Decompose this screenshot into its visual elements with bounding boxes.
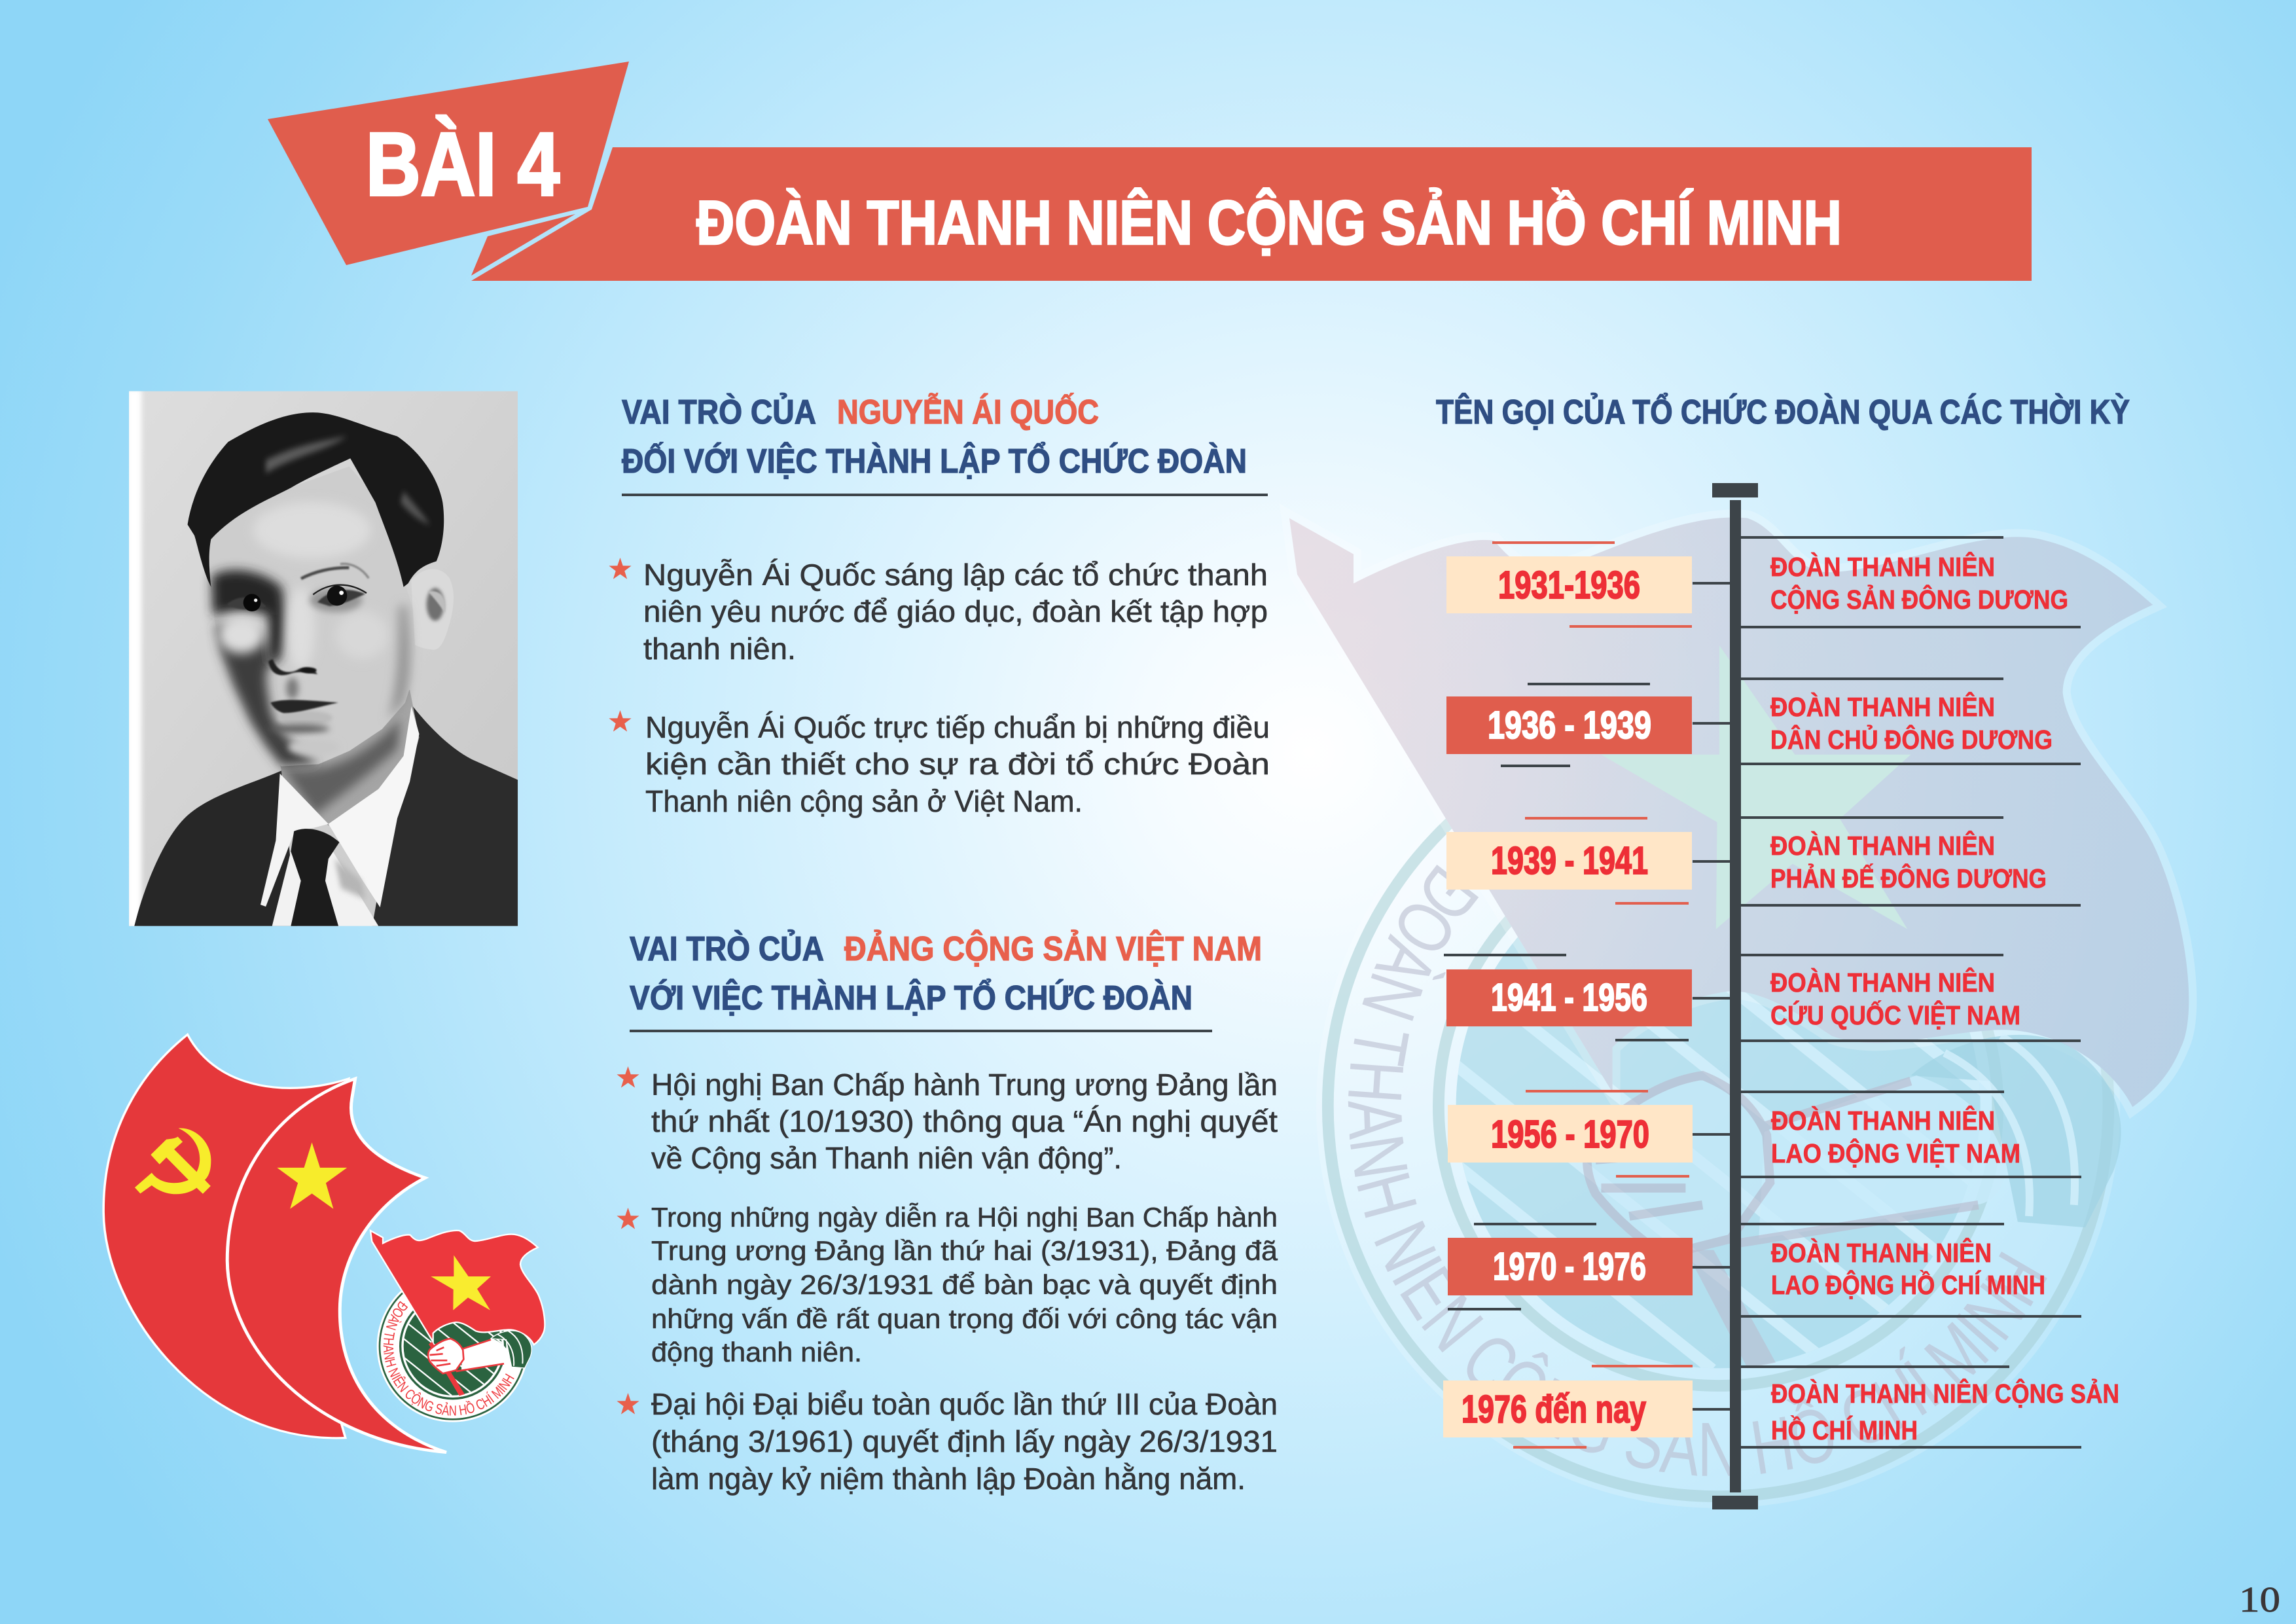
timeline entry 1976 to present: ĐOÀN THANH NIÊN CỘNG SẢN [1771, 1379, 2119, 1409]
timeline entry 1970-1976 [1448, 1224, 2081, 1316]
timeline entry 1939-1941: ĐOÀN THANH NIÊN [1770, 831, 1995, 861]
bullet 2 [617, 1202, 1278, 1367]
emblem flag [370, 1231, 545, 1344]
timeline entry 1939-1941: PHẢN ĐẾ ĐÔNG DƯƠNG [1770, 863, 2047, 893]
timeline entry 1941-1956 [1444, 955, 2081, 1041]
fist [428, 1339, 463, 1373]
arm [461, 1339, 509, 1370]
timeline entry 1931-1936: 1931-1936 [1498, 564, 1640, 607]
emblem star [431, 1255, 491, 1310]
flag star [277, 1142, 347, 1209]
timeline entry 1941-1956: CỨU QUỐC VIỆT NAM [1770, 1000, 2020, 1030]
lesson tag text: BÀI 4 [366, 115, 560, 215]
timeline entry 1931-1936: CỘNG SẢN ĐÔNG DƯƠNG [1770, 585, 2068, 615]
lesson tag shape [268, 62, 629, 265]
section heading: Party role [630, 929, 1262, 1031]
watermark: youth union emblem [1289, 511, 2197, 1508]
arm edges [456, 1340, 504, 1371]
bullet 1: Hội nghị Ban Chấp hành Trung ương Đảng lần [651, 1068, 1278, 1102]
bullet 3 [617, 1387, 1278, 1496]
bullet 2 [609, 710, 1270, 818]
bullet 2: dành ngày 26/3/1931 để bàn bạc và quyết định [651, 1269, 1278, 1300]
emblem seal: ĐOÀN THANH NIÊN CỘNG SẢN HỒ CHÍ MINH [384, 1301, 514, 1415]
flags illustration [103, 1034, 446, 1453]
bullet 3: làm ngày kỷ niệm thành lập Đoàn hằng năm. [651, 1462, 1246, 1496]
timeline entry 1936-1939: 1936 - 1939 [1488, 704, 1651, 747]
banner main band [471, 147, 2032, 281]
bullet 1: thanh niên. [643, 632, 796, 666]
section heading: Party role: VAI TRÒ CỦA [630, 929, 824, 968]
timeline heading: TÊN GỌI CỦA TỔ CHỨC ĐOÀN QUA CÁC THỜI KỲ [1436, 393, 2130, 431]
timeline entry 1956-1970 [1448, 1091, 2081, 1177]
timeline entry 1976 to present: 1976 đến nay [1462, 1388, 1646, 1431]
face and ear [209, 467, 454, 766]
flag pole [429, 1342, 465, 1396]
timeline entry 1976 to present [1443, 1366, 2119, 1447]
bullet 2: Thanh niên cộng sản ở Việt Nam. [645, 784, 1083, 818]
timeline entry 1939-1941 [1446, 818, 2081, 905]
sleeve folds [497, 1331, 523, 1366]
watermark flag [1289, 517, 2189, 1368]
timeline entry 1936-1939: ĐOÀN THANH NIÊN [1770, 692, 1995, 722]
bullet list: Nguyễn Ái Quốc [609, 558, 1270, 818]
section heading: Nguyễn Ái Quốc role: NGUYỄN ÁI QUỐC [837, 393, 1099, 431]
bullet 1 [617, 1066, 1278, 1175]
timeline entry 1970-1976: LAO ĐỘNG HỒ CHÍ MINH [1771, 1270, 2045, 1300]
timeline entry 1931-1936 [1446, 537, 2081, 627]
youth union emblem [369, 1229, 546, 1422]
timeline entry 1970-1976: ĐOÀN THANH NIÊN [1771, 1238, 1992, 1268]
timeline entry 1931-1936: ĐOÀN THANH NIÊN [1770, 552, 1995, 582]
timeline entry 1956-1970: 1956 - 1970 [1491, 1113, 1649, 1156]
section heading: Nguyễn Ái Quốc role [622, 393, 1268, 495]
timeline spine [1712, 483, 1758, 1509]
watermark seal: ĐOÀN THANH NIÊN CỘNG SẢN HỒ CHÍ MINH [1348, 865, 2047, 1476]
section heading: Nguyễn Ái Quốc role: VAI TRÒ CỦA [622, 393, 816, 431]
timeline entry 1976 to present: HỒ CHÍ MINH [1771, 1415, 1918, 1445]
bullet 2: những vấn đề rất quan trọng đối với công tác vận [651, 1303, 1278, 1334]
hammer and sickle [135, 1128, 211, 1194]
bullet 1: niên yêu nước để giáo dục, đoàn kết tập hợp [643, 594, 1268, 628]
bullet 2: Trong những ngày diễn ra Hội nghị Ban Chấp hành [651, 1202, 1278, 1233]
photo backdrop, jacket and shirt [126, 389, 518, 929]
timeline entry 1970-1976: 1970 - 1976 [1493, 1245, 1646, 1288]
section heading: Nguyễn Ái Quốc role: ĐỐI VỚI VIỆC THÀNH LẬP TỔ CHỨC ĐOÀN [622, 442, 1247, 480]
timeline entry 1941-1956: ĐOÀN THANH NIÊN [1770, 967, 1995, 998]
banner ribbon tail [471, 214, 575, 276]
bullet 1 [609, 558, 1268, 666]
bullet 2: kiện cần thiết cho sự ra đời tổ chức Đoàn [645, 747, 1270, 781]
sleeve [491, 1331, 531, 1368]
bullet 2: động thanh niên. [651, 1337, 862, 1367]
national flag [227, 1079, 446, 1453]
timeline entry 1956-1970: ĐOÀN THANH NIÊN [1771, 1106, 1995, 1136]
bullet 2: Nguyễn Ái Quốc trực tiếp chuẩn bị những điều [645, 710, 1270, 744]
bullet 3: Đại hội Đại biểu toàn quốc lần thứ III của Đoàn [651, 1387, 1278, 1421]
section heading: Party role: VỚI VIỆC THÀNH LẬP TỔ CHỨC ĐOÀN [630, 979, 1193, 1017]
bullet 1: Nguyễn Ái Quốc sáng lập các tổ chức thanh [643, 558, 1268, 592]
timeline entry 1936-1939 [1446, 679, 2081, 766]
hair [188, 412, 444, 587]
timeline entry 1939-1941: 1939 - 1941 [1491, 839, 1648, 882]
bullet 1: về Cộng sản Thanh niên vận động”. [651, 1141, 1122, 1175]
bullet list: Party [617, 1066, 1278, 1496]
bullet 3: (tháng 3/1961) quyết định lấy ngày 26/3/1931 [651, 1424, 1278, 1458]
party flag [103, 1034, 349, 1438]
main title text: ĐOÀN THANH NIÊN CỘNG SẢN HỒ CHÍ MINH [696, 187, 1842, 258]
bullet 2: Trung ương Đảng lần thứ hai (3/1931), Đảng đã [651, 1235, 1278, 1266]
timeline entry 1941-1956: 1941 - 1956 [1491, 976, 1647, 1019]
timeline entry 1936-1939: DÂN CHỦ ĐÔNG DƯƠNG [1770, 725, 2053, 755]
title banner [268, 62, 2032, 281]
portrait photo [126, 389, 518, 929]
timeline entry 1956-1970: LAO ĐỘNG VIỆT NAM [1771, 1138, 2020, 1168]
section heading: Party role: ĐẢNG CỘNG SẢN VIỆT NAM [844, 929, 1262, 968]
bullet 1: thứ nhất (10/1930) thông qua “Án nghị quyết [651, 1104, 1278, 1138]
page number: 10 [2239, 1579, 2280, 1619]
